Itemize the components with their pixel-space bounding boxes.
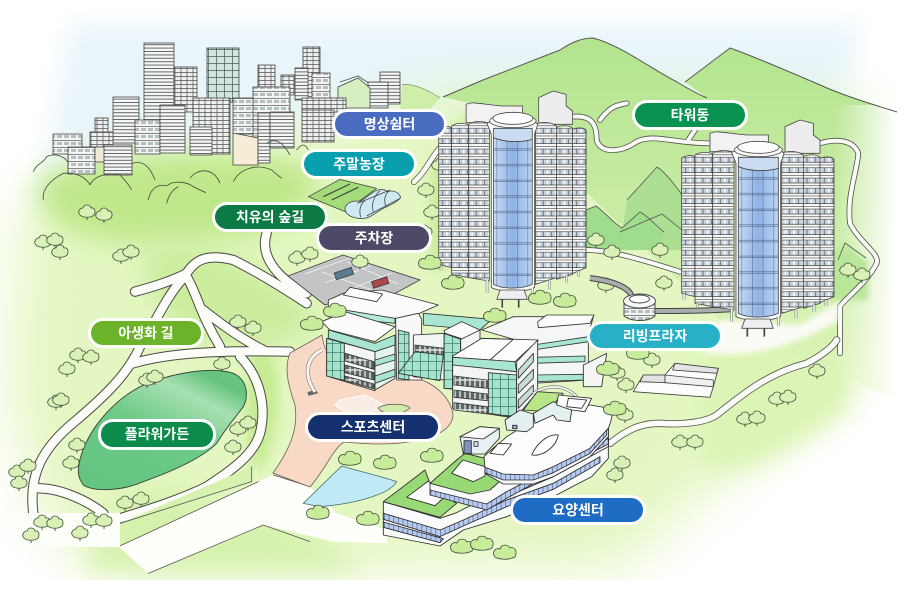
weekend farm <box>308 179 401 219</box>
label: weekend farm <box>301 149 417 179</box>
flower garden lawn <box>78 370 246 490</box>
label: weekend farm: 주말농장 <box>333 156 385 172</box>
small low-rise annex <box>633 363 718 397</box>
community facilities complex <box>322 287 607 418</box>
label: tower building <box>632 100 748 130</box>
label: meditation shelter: 명상쉼터 <box>364 116 415 132</box>
scattered trees <box>9 158 870 511</box>
label: sports center: 스포츠센터 <box>341 419 405 435</box>
label: parking <box>316 223 432 253</box>
parking lot <box>288 255 420 305</box>
walkway between towers <box>590 278 733 311</box>
label: tower building: 타워동 <box>671 107 709 123</box>
sports center plaza <box>273 335 453 487</box>
tower: residences left <box>439 91 586 308</box>
tower: residences right <box>682 120 834 337</box>
label: wildflower trail <box>88 318 204 348</box>
label: healing forest trail: 치유의 숲길 <box>236 209 304 225</box>
label: wildflower trail: 아생화 길 <box>118 325 174 341</box>
label: living plaza: 리빙프라자 <box>623 328 687 344</box>
roads of the left park <box>32 233 387 573</box>
upper and lower access roads <box>414 103 877 443</box>
shrubs near buildings <box>301 255 649 559</box>
label: flower garden: 플라워가든 <box>125 426 189 442</box>
label: living plaza <box>587 321 723 351</box>
forest canopy under skyline <box>33 141 308 203</box>
pond <box>303 466 397 507</box>
care center building <box>383 395 612 546</box>
label: care center <box>510 495 646 525</box>
label: meditation shelter <box>332 109 447 139</box>
skyline city <box>53 43 400 175</box>
label: sports center <box>305 412 441 442</box>
label: parking: 주차장 <box>355 230 393 246</box>
round walkway pavilion <box>624 294 656 320</box>
label: healing forest trail <box>212 202 328 232</box>
label: flower garden <box>98 419 216 450</box>
label: care center: 요양센터 <box>552 502 604 518</box>
white forecourt around right tower <box>702 302 838 354</box>
